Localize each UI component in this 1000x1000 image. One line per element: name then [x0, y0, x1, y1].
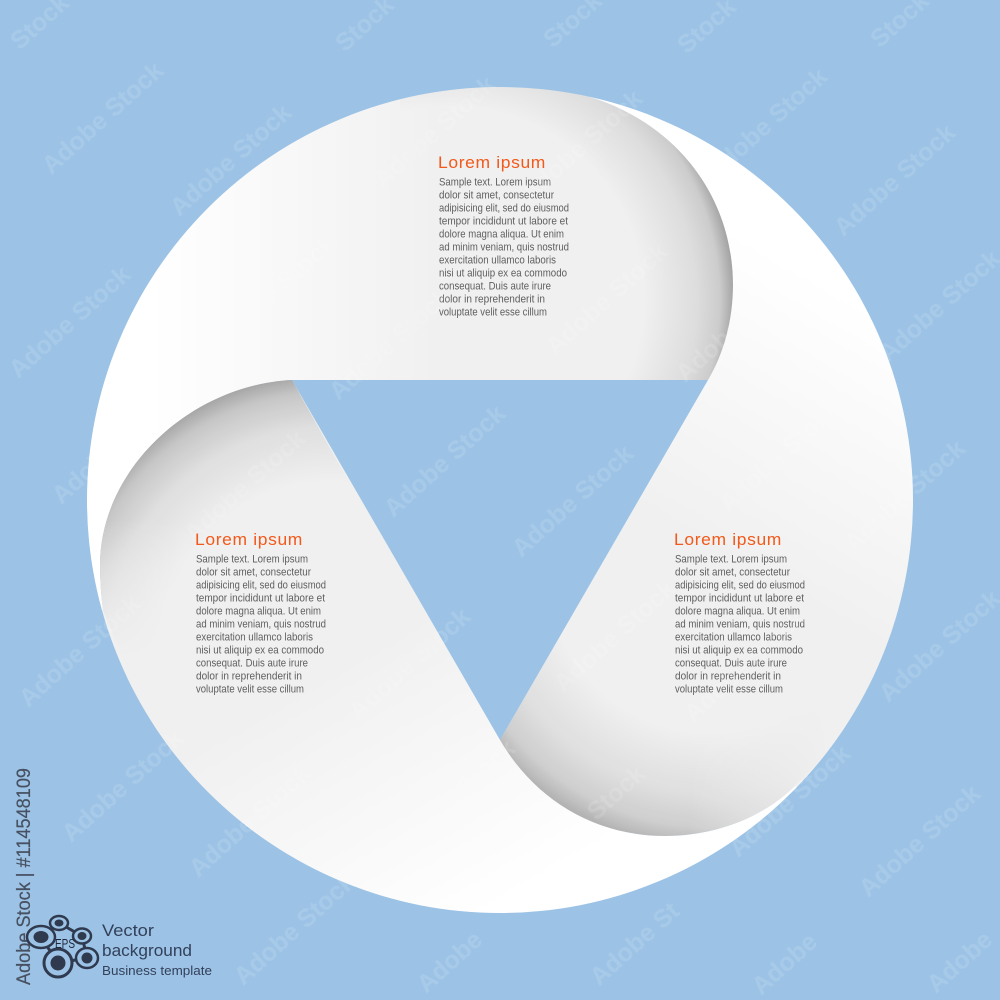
text block: top: adipisicing elit, sed do eiusmod [439, 202, 569, 214]
text block: left [195, 531, 326, 696]
text block: top: voluptate velit esse cillum [439, 306, 547, 318]
watermarks: Adobe Stock [854, 779, 986, 903]
watermarks: Adobe Stock [519, 759, 651, 883]
text block: left: adipisicing elit, sed do eiusmod [196, 580, 326, 592]
text block: right: Sample text. Lorem ipsum [675, 554, 787, 566]
caption: vector background: Vector [102, 921, 154, 940]
text block: right: tempor incididunt ut labore et [675, 592, 804, 604]
watermarks: Adobe Stock [14, 589, 146, 713]
watermarks: Adobe Stock [37, 56, 169, 180]
text block: right: dolor sit amet, consectetur [675, 566, 790, 578]
watermarks: Adobe Stock [379, 399, 511, 523]
text block: top: Sample text. Lorem ipsum [439, 176, 551, 188]
watermarks: Adobe Stock [229, 867, 361, 991]
watermarks: Adobe Stock [507, 439, 639, 563]
watermarks: Adobe Stock [541, 237, 673, 361]
watermarks: Adobe Stock [829, 118, 961, 242]
watermarks: Adobe Stock [209, 229, 341, 353]
text block: right: dolore magna aliqua. Ut enim [675, 606, 800, 618]
text block: left: consequat. Duis aute irure [196, 658, 308, 670]
watermarks: Adobe Stock [47, 386, 179, 510]
panel: top sheet [87, 87, 733, 610]
text block: left: tempor incididunt ut labore et [196, 592, 325, 604]
caption: vector background: background [102, 941, 192, 960]
text block: right [674, 531, 805, 696]
panel: left sheet [100, 380, 798, 913]
text block: left: Sample text. Lorem ipsum [196, 554, 308, 566]
watermarks: Adobe Stock [389, 734, 521, 858]
text block: right: dolor in reprehenderit in [675, 670, 781, 682]
watermarks: Adobe Stock [179, 424, 311, 548]
watermarks: Adobe [921, 926, 998, 998]
text block: right: Lorem ipsum [674, 531, 782, 549]
text block: left: ad minim veniam, quis nostrud [196, 618, 326, 630]
watermarks: Adobe [411, 926, 488, 998]
text block: top: ad minim veniam, quis nostrud [439, 242, 569, 254]
text block: left: dolore magna aliqua. Ut enim [196, 606, 321, 618]
watermarks: Adobe Stock [714, 394, 846, 518]
watermarks: Adobe Stock [184, 759, 316, 883]
icon: EPS logo: EPS [55, 936, 75, 951]
panel: right sheet [500, 96, 913, 836]
text block: right: adipisicing elit, sed do eiusmod [675, 580, 805, 592]
text block: right: exercitation ullamco laboris [675, 632, 792, 644]
text block: left: dolor sit amet, consectetur [196, 566, 311, 578]
text block: top: dolore magna aliqua. Ut enim [439, 228, 564, 240]
text block: right: nisi ut aliquip ex ea commodo [675, 644, 803, 656]
text block: top: exercitation ullamco laboris [439, 254, 556, 266]
watermarks: Adobe St [585, 896, 685, 991]
text block: right: voluptate velit esse cillum [675, 684, 783, 696]
text block: left: dolor in reprehenderit in [196, 670, 302, 682]
watermarks: Adobe Stock [324, 282, 456, 406]
watermarks: Adobe Stock [369, 70, 501, 194]
watermarks: Adobe Stock [724, 739, 856, 863]
watermarks: Adobe Stock [679, 604, 811, 728]
watermarks: Adobe Stock [344, 602, 476, 726]
text block: right: consequat. Duis aute irure [675, 658, 787, 670]
text block: left: nisi ut aliquip ex ea commodo [196, 644, 324, 656]
watermarks: Adobe Stock [701, 62, 833, 186]
text block: left: Lorem ipsum [195, 531, 303, 549]
watermarks: Adobe Stock [839, 434, 971, 558]
icon: EPS logo [27, 916, 98, 977]
watermarks: Adobe Stock [549, 574, 681, 698]
text block: top: dolor in reprehenderit in [439, 294, 545, 306]
caption: vector background: Business template [102, 963, 212, 978]
text block: left: exercitation ullamco laboris [196, 632, 313, 644]
caption: vector background [102, 921, 212, 978]
text block: right: ad minim veniam, quis nostrud [675, 618, 805, 630]
text block: top: tempor incididunt ut labore et [439, 216, 568, 228]
watermarks: Adobe Stock [4, 260, 136, 384]
text block: top [438, 154, 569, 318]
text block: top: Lorem ipsum [438, 154, 546, 172]
watermarks: Adobe Stock [671, 264, 803, 388]
stock id, vertical text: Adobe Stock | #114548109 [14, 768, 35, 985]
watermarks: Adobe Stock [516, 84, 648, 208]
watermarks: Adobe Stock [165, 98, 297, 222]
watermarks: Adobe [746, 928, 823, 1000]
text block: left: voluptate velit esse cillum [196, 684, 304, 696]
text block: top: consequat. Duis aute irure [439, 280, 551, 292]
text block: top: dolor sit amet, consectetur [439, 190, 554, 202]
watermarks: Adobe Stock [57, 724, 189, 848]
text block: top: nisi ut aliquip ex ea commodo [439, 268, 567, 280]
circular diagram of three folded sheets [87, 87, 913, 913]
